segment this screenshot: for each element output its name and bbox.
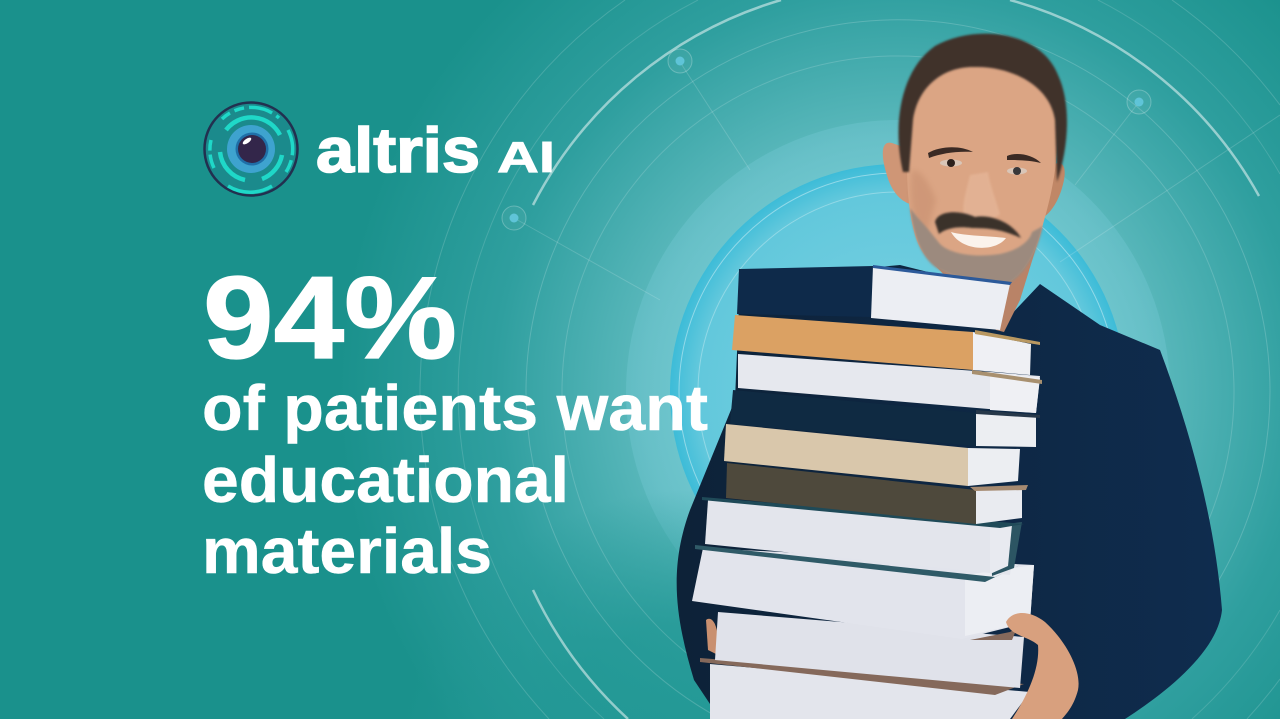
book 2 <box>732 315 1040 375</box>
logo wordmark <box>316 116 555 186</box>
book 5 <box>724 424 1020 486</box>
nose <box>963 172 1000 220</box>
face shading <box>911 170 936 240</box>
neck <box>930 235 1040 332</box>
concentric rings <box>400 0 1280 719</box>
ears <box>883 143 912 204</box>
headline <box>202 252 708 587</box>
left hand <box>706 619 718 655</box>
eyes <box>940 160 962 166</box>
book 9 <box>715 612 1024 688</box>
head <box>883 34 1067 284</box>
man holding books <box>677 34 1222 719</box>
beard <box>910 208 1043 284</box>
subheading: educational <box>202 444 569 516</box>
book 6 <box>726 463 1028 524</box>
eyebrows <box>928 147 973 158</box>
book 3 <box>738 354 1042 413</box>
hair <box>898 34 1067 182</box>
book 7 <box>702 497 1024 576</box>
logo wordmark: AI <box>497 133 555 182</box>
big percentage: 94% <box>203 252 457 383</box>
logo wordmark: altris <box>316 116 480 186</box>
subheading: materials <box>202 515 492 587</box>
face <box>907 60 1057 284</box>
subheading: of patients want <box>202 372 708 444</box>
jacket <box>677 265 1222 719</box>
book 4 <box>730 390 1040 447</box>
book stack <box>692 265 1042 719</box>
book 8 <box>692 545 1034 639</box>
logo icon: eye <box>204 102 298 196</box>
network nodes <box>502 49 1151 230</box>
book 1 <box>737 265 1012 330</box>
book 10 <box>700 658 1030 719</box>
right hand <box>1006 613 1079 719</box>
subheading <box>202 372 708 587</box>
moustache <box>935 212 1021 238</box>
smile <box>951 232 1006 248</box>
